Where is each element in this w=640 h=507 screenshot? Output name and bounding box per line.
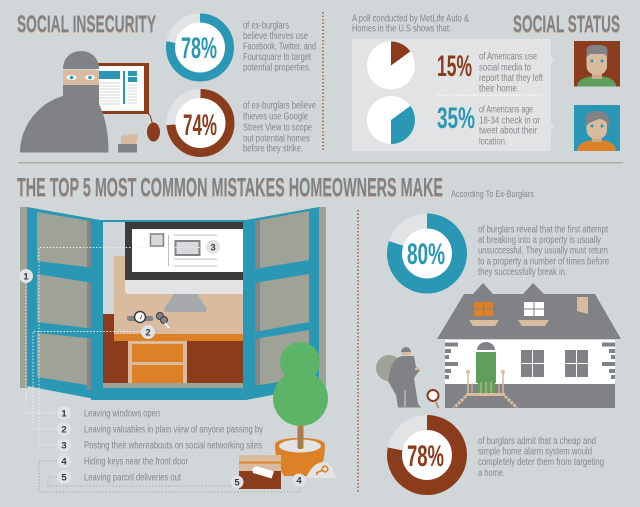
computer mouse <box>147 114 160 142</box>
illustration: burglar with sack <box>376 347 421 408</box>
stone quoins <box>445 342 615 379</box>
key under stone <box>306 462 336 478</box>
item 3: Posting their whereabouts on social networking sites <box>84 440 262 452</box>
item 4 <box>57 454 189 468</box>
monitor <box>96 63 149 114</box>
text: 35 percent description: 18-34 check in or <box>479 116 541 126</box>
text: 74 percent description: before they strike. <box>243 144 303 154</box>
heading: social insecurity: SOCIAL INSECURITY <box>17 12 156 39</box>
burglar figure <box>20 51 108 152</box>
text: 78 percent description: Foursquare to target <box>243 52 311 63</box>
windows <box>521 350 588 377</box>
gloved hand <box>118 133 138 152</box>
text: 74 percent description <box>243 100 316 154</box>
text: poll introduction: A poll conducted by MetLife Auto & <box>352 14 469 24</box>
item 1: 1 <box>61 408 67 420</box>
marker: number 3 <box>206 240 220 254</box>
roof with dormers <box>437 283 621 339</box>
flower pot <box>275 438 325 476</box>
text: 15 percent description: report that they left <box>479 73 543 84</box>
blue window frame <box>27 207 319 400</box>
house base <box>445 384 615 408</box>
item 2 <box>57 422 263 436</box>
donut: 78 percent alarm: 78% <box>407 440 444 473</box>
front door <box>476 342 496 393</box>
text: 80 percent description: they successfully break in. <box>478 267 567 278</box>
tree in pot <box>273 342 328 476</box>
donut: 78 percent alarm <box>394 422 460 488</box>
avatar: man on brown <box>574 41 620 86</box>
marker: number 4: 4 <box>296 476 302 486</box>
illustration: burglar at computer <box>20 51 160 152</box>
marker: number 1 <box>19 269 33 283</box>
donut: 80 percent: 80% <box>407 238 445 271</box>
text: 35 percent description <box>479 104 541 148</box>
heading: social insecurity: SOCIAL INSECURITY <box>17 11 156 38</box>
illustration: open window <box>20 207 326 445</box>
text: 78 percent alarm description: completely deter them from targeting <box>478 457 604 468</box>
text: 78 percent description <box>243 20 316 74</box>
watch on desk <box>127 312 153 322</box>
keys on desk <box>156 312 169 328</box>
dotted leader lines <box>26 248 213 445</box>
donut: 74 percent <box>171 94 230 152</box>
donut: 78 percent <box>170 18 230 77</box>
porch steps and railing <box>454 370 517 408</box>
text: 78 percent description: of ex-burglars <box>243 20 289 32</box>
left shutter panes <box>37 212 103 400</box>
marker: number 5 <box>230 476 244 488</box>
desktop computer with social site <box>125 222 243 312</box>
text: 80 percent description: at breaking into a property is usually <box>478 235 601 246</box>
donut: 80 percent <box>394 221 460 286</box>
pie: 35 percent <box>367 96 415 144</box>
marker: number 4 <box>292 474 306 486</box>
item 3: 3 <box>61 440 67 452</box>
text: 74 percent description: out potential homes <box>243 134 310 144</box>
item 1 <box>57 406 160 420</box>
text: 74 percent description: of ex-burglars believe <box>243 100 316 112</box>
donut: 74 percent: 74% <box>183 109 217 142</box>
text: 15 percent description <box>479 52 543 94</box>
text: 78 percent alarm description <box>478 436 604 479</box>
list: five mistakes <box>57 406 263 484</box>
heading: top 5 mistakes <box>17 172 443 203</box>
text: 78 percent description: Facebook, Twitter, and <box>243 42 316 52</box>
heading: social insecurity <box>17 11 156 39</box>
leader line for items 4 and 5 <box>39 461 300 492</box>
text: 74 percent description: thieves use Google <box>243 112 308 122</box>
text: 35 percent description: of Americans age <box>479 104 533 116</box>
text: 74 percent description: Street View to scope <box>243 122 312 134</box>
text: 15 percent description: social media to <box>479 62 531 74</box>
marker: number 5: 5 <box>234 478 240 488</box>
text: 35 percent description: location. <box>479 136 507 148</box>
text: 78 percent alarm description: a home. <box>478 468 505 479</box>
item 2: 2 <box>61 424 67 436</box>
text: 15 percent description: their home. <box>479 84 519 94</box>
item 4: 4 <box>61 456 67 468</box>
text: 80 percent description <box>478 224 609 278</box>
text: poll introduction <box>352 14 469 34</box>
item 2: Leaving valuables in plain view of anyone passing by <box>84 424 263 436</box>
text: 15 percent description: of Americans use <box>479 52 537 62</box>
parcel <box>239 455 281 489</box>
marker: number 1: 1 <box>23 272 29 282</box>
right shutter panes <box>255 211 309 385</box>
foliage <box>273 342 328 426</box>
item 5: 5 <box>61 472 67 484</box>
text: 78 percent alarm description: of burglars admit that a cheap and <box>478 436 596 447</box>
donut: 78 percent: 78% <box>181 32 217 65</box>
marker: number 2 <box>141 325 155 339</box>
item 5: Leaving parcel deliveries out <box>84 472 181 484</box>
panel: social status statistics <box>352 39 554 151</box>
text: 78 percent description: believe thieves use <box>243 31 308 42</box>
item 3 <box>57 438 262 452</box>
item 5 <box>57 470 181 484</box>
marker: number 3: 3 <box>210 242 216 254</box>
marker: number 2: 2 <box>145 328 151 338</box>
subheading: according to ex-burglars: According To Ex-Burglars <box>451 189 534 199</box>
item 4: Hiding keys near the front door <box>84 456 189 468</box>
pie: 15 percent <box>367 42 415 90</box>
text: 78 percent alarm description: simple home alarm system would <box>478 446 592 458</box>
text: 35 percent description: tweet about their <box>479 126 538 136</box>
room interior <box>103 222 243 388</box>
illustration: house <box>437 283 621 408</box>
icon: magnifying glass <box>428 390 438 408</box>
item 1: Leaving windows open <box>84 408 160 420</box>
stat: 35 percent: 35% <box>437 102 475 135</box>
text: poll introduction: Homes in the U.S shows that: <box>352 24 451 34</box>
outer wall strips <box>20 207 326 388</box>
text: 78 percent description: potential properties. <box>243 62 311 74</box>
avatar: woman on blue <box>574 105 620 151</box>
stat: 15 percent: 15% <box>437 50 472 83</box>
house front wall <box>445 340 615 384</box>
